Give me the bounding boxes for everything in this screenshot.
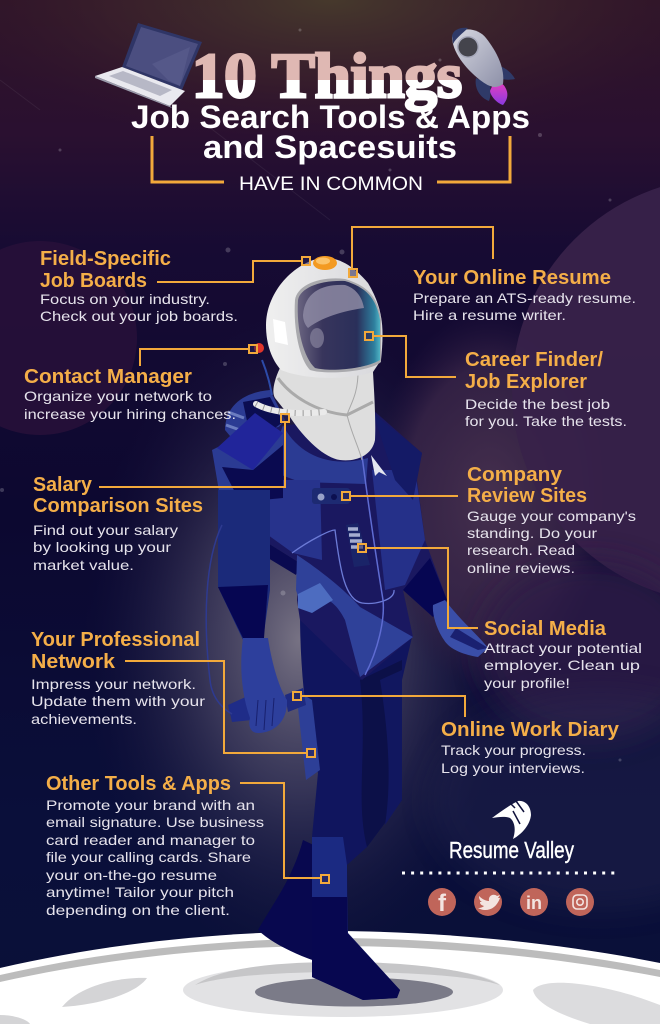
- callout: social media: employer. Clean up: [484, 657, 640, 673]
- callout: other tools and apps: Other Tools & Apps: [46, 772, 231, 795]
- callout: field-specific job boards: Focus on your industry.: [40, 291, 210, 307]
- icon: rocket: [452, 28, 515, 105]
- helmet collar: [273, 368, 375, 460]
- callout: field-specific job boards: Job Boards: [40, 269, 147, 292]
- callout: your professional network: [31, 628, 315, 757]
- callout: field-specific job boards: [40, 247, 310, 324]
- title: [131, 40, 530, 195]
- callout: career finder: Career Finder/: [465, 348, 603, 371]
- title: job search line: Job Search Tools & Apps: [131, 99, 530, 135]
- subtitle: HAVE IN COMMON: [239, 174, 423, 195]
- callout: your professional network: achievements.: [31, 711, 137, 727]
- moon surface: [0, 931, 660, 1024]
- back leg: [258, 840, 345, 968]
- callout: your online resume: Prepare an ATS-ready resume.: [413, 290, 636, 306]
- torso: [262, 410, 447, 680]
- callout: company review sites: online reviews.: [467, 560, 575, 576]
- callout: other tools and apps: file your calling cards. Share: [46, 849, 251, 865]
- helmet: [266, 258, 383, 378]
- side plate: [273, 319, 288, 345]
- callout: company review sites: research. Read: [467, 542, 575, 558]
- icon: facebook: f: [438, 890, 447, 917]
- visor rim: [295, 278, 381, 372]
- callout: online work diary: Log your interviews.: [441, 760, 585, 776]
- title bracket: [152, 136, 510, 182]
- edge crater: [0, 1015, 30, 1024]
- callout: your professional network: Your Professional: [31, 628, 200, 651]
- callout: social media: your profile!: [484, 675, 570, 691]
- callout: contact manager: increase your hiring chances.: [24, 406, 236, 422]
- helmet lamp: [313, 256, 337, 270]
- icon: instagram: [566, 888, 594, 916]
- callout: your online resume: Hire a resume writer.: [413, 307, 566, 323]
- callout: salary comparison sites: [33, 414, 289, 573]
- front leg: [300, 613, 412, 1000]
- callout: career finder: Job Explorer: [465, 370, 587, 393]
- callout: other tools and apps: your on-the-go resume: [46, 867, 217, 883]
- callout: career finder: for you. Take the tests.: [465, 413, 627, 429]
- social icons: [428, 888, 594, 917]
- callout: other tools and apps: Promote your brand with an: [46, 797, 255, 813]
- callout: salary comparison sites: by looking up your: [33, 539, 171, 555]
- callout: other tools and apps: card reader and manager to: [46, 832, 255, 848]
- callout: your online resume: [349, 227, 636, 323]
- callout: your online resume: Your Online Resume: [413, 266, 611, 289]
- astronaut: [206, 256, 488, 1000]
- icon: linkedin: in: [526, 893, 542, 913]
- callout: social media: [358, 544, 642, 691]
- callout: salary comparison sites: market value.: [33, 557, 134, 573]
- backpack: [225, 390, 285, 460]
- callout: other tools and apps: depending on the client.: [46, 902, 230, 918]
- callout: field-specific job boards: Check out your job boards.: [40, 308, 238, 324]
- callout: online work diary: Track your progress.: [441, 742, 586, 758]
- visor: [298, 281, 380, 370]
- hose: [256, 404, 324, 413]
- crater: [183, 963, 503, 1017]
- right arm: [403, 558, 447, 617]
- right crater: [533, 983, 660, 1024]
- callout: salary comparison sites: Find out your salary: [33, 522, 178, 538]
- icon: logo swoosh: [492, 801, 531, 839]
- chest panel: [312, 488, 350, 504]
- small crater: [62, 978, 147, 1007]
- callout: company review sites: Review Sites: [467, 484, 587, 507]
- callout: company review sites: Company: [467, 463, 563, 486]
- callout: other tools and apps: [46, 772, 329, 918]
- callout: other tools and apps: email signature. Use business: [46, 814, 264, 830]
- icon: laptop: [95, 23, 202, 108]
- callout: career finder: Decide the best job: [465, 396, 610, 412]
- callout: salary comparison sites: Comparison Sites: [33, 494, 203, 517]
- icon: twitter: [474, 888, 502, 916]
- star badge: [371, 455, 387, 476]
- callout: contact manager: Organize your network to: [24, 388, 212, 404]
- dotted divider: [402, 872, 618, 874]
- callout: online work diary: Online Work Diary: [441, 718, 620, 741]
- callout: social media: Social Media: [484, 617, 607, 640]
- left arm: [218, 490, 270, 640]
- title: 10 Things: 10 Things: [192, 40, 462, 111]
- logo: resume valley: [402, 801, 618, 873]
- red light: [254, 343, 264, 353]
- icon: linkedin: [520, 888, 548, 916]
- callout: other tools and apps: anytime! Tailor your pitch: [46, 884, 234, 900]
- callout: your professional network: Impress your network.: [31, 676, 196, 692]
- callout: contact manager: Contact Manager: [24, 365, 192, 388]
- callout: online work diary: [293, 692, 620, 776]
- callout: field-specific job boards: Field-Specific: [40, 247, 171, 270]
- antenna cable: [262, 360, 272, 395]
- left shoulder: [212, 425, 283, 500]
- callout: salary comparison sites: Salary: [33, 473, 93, 496]
- callout: your professional network: Update them with your: [31, 693, 205, 709]
- callout: social media: Attract your potential: [484, 640, 642, 656]
- wordmark: Resume Valley: [449, 837, 574, 863]
- callout: career finder: [365, 332, 627, 429]
- callout: company review sites: [342, 463, 636, 576]
- icon: facebook: [428, 888, 456, 917]
- callout: company review sites: standing. Do your: [467, 525, 597, 541]
- callout: company review sites: Gauge your company's: [467, 508, 636, 524]
- callout: your professional network: Network: [31, 650, 116, 673]
- callout: contact manager: [24, 345, 257, 422]
- title: spacesuits line: and Spacesuits: [203, 129, 457, 165]
